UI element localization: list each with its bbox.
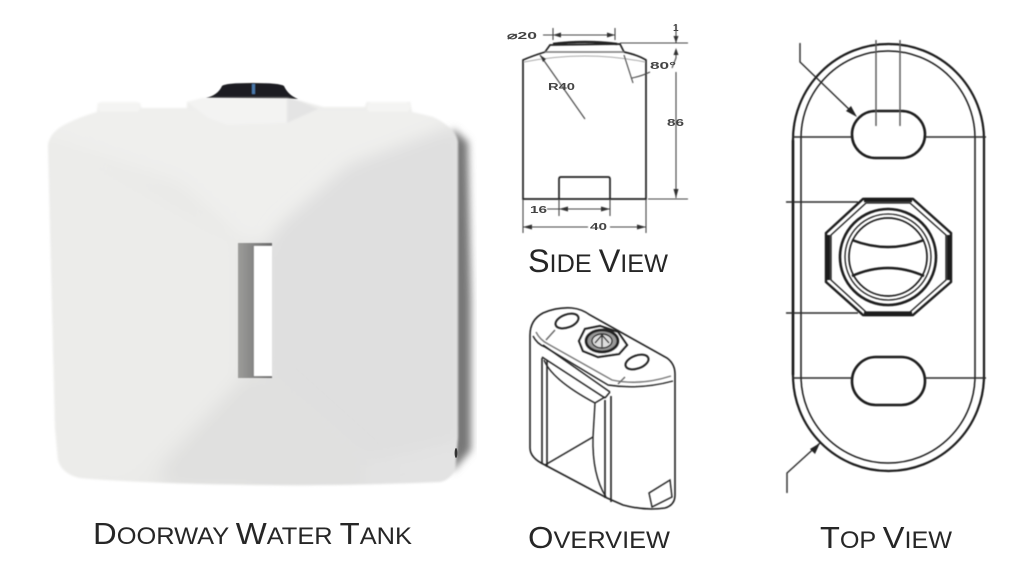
inner outline: [801, 51, 975, 463]
tank outline: [523, 44, 646, 199]
door notch: [559, 177, 610, 199]
door recess: [542, 358, 547, 467]
lid rings: [840, 209, 936, 305]
dimension labels: 80°: [650, 61, 676, 72]
door opening: [238, 243, 272, 378]
fill port caps: [98, 102, 140, 112]
top rim: [533, 336, 673, 387]
tank body: [40, 95, 470, 490]
dimension labels: 1: [673, 23, 679, 34]
dimension labels: 16: [530, 205, 548, 216]
dimension labels: ⌀20: [507, 31, 538, 42]
heading: overview: OVERVIEW: [528, 520, 670, 555]
heading: doorway water tank: DOORWAY WATER TANK: [93, 516, 412, 551]
dimension lines: [523, 25, 688, 233]
hex lid: [579, 326, 627, 357]
neck facet: [187, 98, 287, 125]
corner label plate: [649, 480, 672, 507]
lower triangle shading: [176, 426, 212, 482]
bottom oval port: [852, 357, 925, 405]
dimension labels: [507, 23, 685, 233]
arrowheads: [523, 32, 678, 230]
lid grip curves: [852, 240, 924, 247]
leader arrowheads: [846, 106, 857, 117]
tank drain: [455, 448, 457, 458]
diagram: top view: [786, 40, 986, 493]
diagram: overview: [530, 308, 675, 509]
photo: doorway water tank: [40, 83, 471, 490]
centre lines and leaders: [786, 40, 986, 493]
dimension labels: 40: [590, 222, 608, 233]
body outline: [530, 308, 675, 509]
outer outline: [793, 44, 984, 471]
tank cap: [206, 83, 298, 99]
dimension labels: R40: [548, 82, 576, 93]
heading: side view: SIDE VIEW: [528, 243, 668, 279]
tank drop shadow: [452, 128, 471, 472]
octagonal lid: [826, 199, 951, 315]
heading: top view: TOP VIEW: [820, 520, 952, 555]
upper funnel shading: [242, 106, 443, 237]
dimension labels: 86: [667, 118, 685, 129]
diagram: side view: [523, 25, 688, 233]
top oval port: [852, 111, 925, 158]
fill ports: [554, 311, 580, 331]
